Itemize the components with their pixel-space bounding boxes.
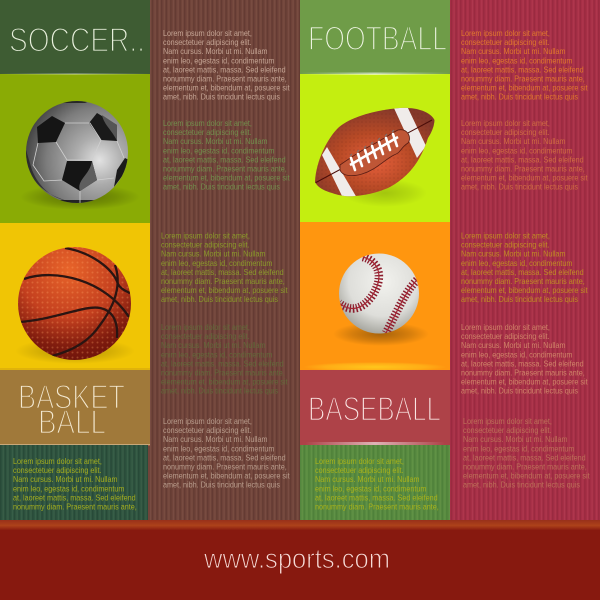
text block 3: consectetuer adipiscing elit. (461, 240, 550, 250)
text block 5 (163, 417, 290, 490)
text block 2: at, laoreet mattis, massa. Sed eleifend (461, 155, 584, 165)
heading: football: FOOTBALL (308, 20, 447, 58)
text block 2: nonummy diam. Praesent mauris ante, (461, 164, 585, 174)
text block: nonummy diam. Praesent mauris ante, (315, 502, 439, 512)
text block: enim leo, egestas id, condimentum (315, 484, 426, 493)
text block 1: at, laoreet mattis, massa. Sed eleifend (163, 65, 286, 75)
text block 2 (461, 119, 588, 192)
text block 4: amet, nibh. Duis tincidunt lectus quis (461, 386, 578, 396)
text block: at, laoreet mattis, massa. Sed eleifend (13, 493, 136, 503)
panel: basketball bottom text (0, 445, 148, 520)
panel: basketball heading block (0, 370, 150, 446)
text block 2: amet, nibh. Duis tincidunt lectus quis (461, 182, 578, 192)
text block 1: elementum et, bibendum at, posuere sit (163, 83, 290, 93)
text block 2: Lorem ipsum dolor sit amet, (461, 119, 550, 128)
footer band (0, 520, 600, 600)
text block: Nam cursus. Morbi ut mi. Nullam (315, 475, 420, 484)
text block 3: amet, nibh. Duis tincidunt lectus quis (461, 295, 578, 304)
text block 4: enim leo, egestas id, condimentum (461, 350, 572, 359)
text block (315, 457, 439, 512)
icon: baseball (333, 254, 429, 346)
text block 2: elementum et, bibendum at, posuere sit (163, 173, 290, 183)
heading: baseball: BASEBALL (308, 390, 441, 428)
text block 2: Nam cursus. Morbi ut mi. Nullam (461, 137, 566, 146)
text block (13, 457, 137, 512)
panel: crimson text column (450, 0, 600, 520)
text block 3: Nam cursus. Morbi ut mi. Nullam (461, 249, 566, 259)
text block 3 (461, 231, 588, 304)
text block 4: at, laoreet mattis, massa. Sed eleifend (461, 359, 584, 369)
text block 4: Nam cursus. Morbi ut mi. Nullam (161, 341, 266, 350)
text block 3: enim leo, egestas id, condimentum (161, 258, 272, 268)
text block 2: Lorem ipsum dolor sit amet, (163, 119, 252, 128)
text block 5: Lorem ipsum dolor sit amet, (163, 417, 252, 426)
text block 4: Lorem ipsum dolor sit amet, (161, 323, 250, 332)
text block 2: consectetuer adipiscing elit. (163, 128, 252, 137)
text block 3: elementum et, bibendum at, posuere sit (161, 286, 288, 295)
heading: basket ball (18, 378, 125, 442)
text block 5: nonummy diam. Praesent mauris ante, (163, 462, 287, 472)
text block 3 (161, 231, 288, 304)
text block 5 (463, 417, 590, 490)
panel: baseball bottom text (300, 445, 450, 520)
text block 1: nonummy diam. Praesent mauris ante, (163, 74, 287, 84)
panel: basketball colour block (0, 220, 150, 370)
text block 1 (461, 29, 588, 102)
icon: soccer ball (26, 101, 132, 208)
panel: baseball heading block (300, 370, 450, 445)
text block 5: enim leo, egestas id, condimentum (463, 444, 574, 453)
text block 4: Lorem ipsum dolor sit amet, (461, 323, 550, 332)
panel: soccer column (0, 0, 150, 222)
text block 1: consectetuer adipiscing elit. (461, 38, 550, 47)
text block 1: amet, nibh. Duis tincidunt lectus quis (163, 92, 280, 102)
text block 2: amet, nibh. Duis tincidunt lectus quis (163, 182, 280, 192)
text block 1: consectetuer adipiscing elit. (163, 38, 252, 47)
text block 2: at, laoreet mattis, massa. Sed eleifend (163, 155, 286, 165)
text block 4 (161, 323, 288, 396)
text block 5: Nam cursus. Morbi ut mi. Nullam (463, 435, 568, 444)
text block 3: enim leo, egestas id, condimentum (461, 258, 572, 268)
text block 5: nonummy diam. Praesent mauris ante, (463, 462, 587, 472)
text block 4: elementum et, bibendum at, posuere sit (461, 377, 588, 387)
text block: consectetuer adipiscing elit. (315, 466, 404, 475)
text block 3: amet, nibh. Duis tincidunt lectus quis (161, 295, 278, 304)
text block 5: at, laoreet mattis, massa. Sed eleifend (163, 453, 286, 463)
text block 5: amet, nibh. Duis tincidunt lectus quis (463, 480, 580, 490)
heading: soccer: SOCCER.. (9, 22, 145, 60)
text block: Nam cursus. Morbi ut mi. Nullam (13, 475, 118, 484)
icon: basketball (15, 247, 135, 364)
text block 4: elementum et, bibendum at, posuere sit (161, 377, 288, 387)
text block 2: consectetuer adipiscing elit. (461, 128, 550, 137)
text block 3: Lorem ipsum dolor sit amet, (161, 231, 250, 241)
text block 4: consectetuer adipiscing elit. (461, 332, 550, 341)
text block: consectetuer adipiscing elit. (13, 466, 102, 475)
text block 1: Nam cursus. Morbi ut mi. Nullam (163, 47, 268, 56)
text block 1: nonummy diam. Praesent mauris ante, (461, 74, 585, 84)
text block 4: at, laoreet mattis, massa. Sed eleifend (161, 359, 284, 369)
text block 2: nonummy diam. Praesent mauris ante, (163, 164, 287, 174)
text block: enim leo, egestas id, condimentum (13, 484, 124, 493)
text block 3: elementum et, bibendum at, posuere sit (461, 286, 588, 295)
text block 5: Lorem ipsum dolor sit amet, (463, 417, 552, 426)
text block 2: Nam cursus. Morbi ut mi. Nullam (163, 137, 268, 146)
text block: nonummy diam. Praesent mauris ante, (13, 502, 137, 512)
panel: baseball colour block (300, 219, 450, 372)
text block: at, laoreet mattis, massa. Sed eleifend (315, 493, 438, 503)
text block 2: elementum et, bibendum at, posuere sit (461, 173, 588, 183)
text block 1: Lorem ipsum dolor sit amet, (163, 29, 252, 38)
text block 1: enim leo, egestas id, condimentum (163, 56, 274, 65)
text block 4: nonummy diam. Praesent mauris ante, (161, 368, 285, 378)
text block 3: Nam cursus. Morbi ut mi. Nullam (161, 249, 266, 259)
footer url: www.sports.com (203, 543, 390, 574)
text block 5: at, laoreet mattis, massa. Sed eleifend (463, 453, 586, 463)
text block 2: enim leo, egestas id, condimentum (163, 146, 274, 155)
text block 3: at, laoreet mattis, massa. Sed eleifend (461, 267, 584, 277)
text block 1: enim leo, egestas id, condimentum (461, 56, 572, 65)
text block 3: nonummy diam. Praesent mauris ante, (461, 277, 585, 286)
text block 5: consectetuer adipiscing elit. (463, 426, 552, 435)
heading: basket ball: BALL (38, 404, 106, 442)
text block 3: at, laoreet mattis, massa. Sed eleifend (161, 267, 284, 277)
heading: basket ball: BASKET (18, 378, 125, 416)
text block 2 (163, 119, 290, 192)
text block 5: consectetuer adipiscing elit. (163, 426, 252, 435)
text block 3: Lorem ipsum dolor sit amet, (461, 231, 550, 241)
text block 5: elementum et, bibendum at, posuere sit (463, 471, 590, 481)
text block: Lorem ipsum dolor sit amet, (13, 457, 102, 466)
text block 1: Nam cursus. Morbi ut mi. Nullam (461, 47, 566, 56)
text block 4: amet, nibh. Duis tincidunt lectus quis (161, 386, 278, 396)
text block 1: Lorem ipsum dolor sit amet, (461, 29, 550, 38)
text block 1 (163, 29, 290, 102)
text block 4: Nam cursus. Morbi ut mi. Nullam (461, 341, 566, 350)
text block 3: consectetuer adipiscing elit. (161, 240, 250, 250)
text block 4: consectetuer adipiscing elit. (161, 332, 250, 341)
text block 5: elementum et, bibendum at, posuere sit (163, 471, 290, 481)
text block 5: enim leo, egestas id, condimentum (163, 444, 274, 453)
text block 2: enim leo, egestas id, condimentum (461, 146, 572, 155)
text block: Lorem ipsum dolor sit amet, (315, 457, 404, 466)
text block 5: amet, nibh. Duis tincidunt lectus quis (163, 480, 280, 490)
text block 4: enim leo, egestas id, condimentum (161, 350, 272, 359)
text block 1: amet, nibh. Duis tincidunt lectus quis (461, 92, 578, 102)
text block 4 (461, 323, 588, 396)
text block 1: at, laoreet mattis, massa. Sed eleifend (461, 65, 584, 75)
text block 4: nonummy diam. Praesent mauris ante, (461, 368, 585, 378)
text block 5: Nam cursus. Morbi ut mi. Nullam (163, 435, 268, 444)
text block 1: elementum et, bibendum at, posuere sit (461, 83, 588, 93)
text block 3: nonummy diam. Praesent mauris ante, (161, 277, 285, 286)
panel: football column (300, 0, 450, 222)
icon: american football (315, 108, 434, 204)
panel: brown text column (148, 0, 300, 520)
